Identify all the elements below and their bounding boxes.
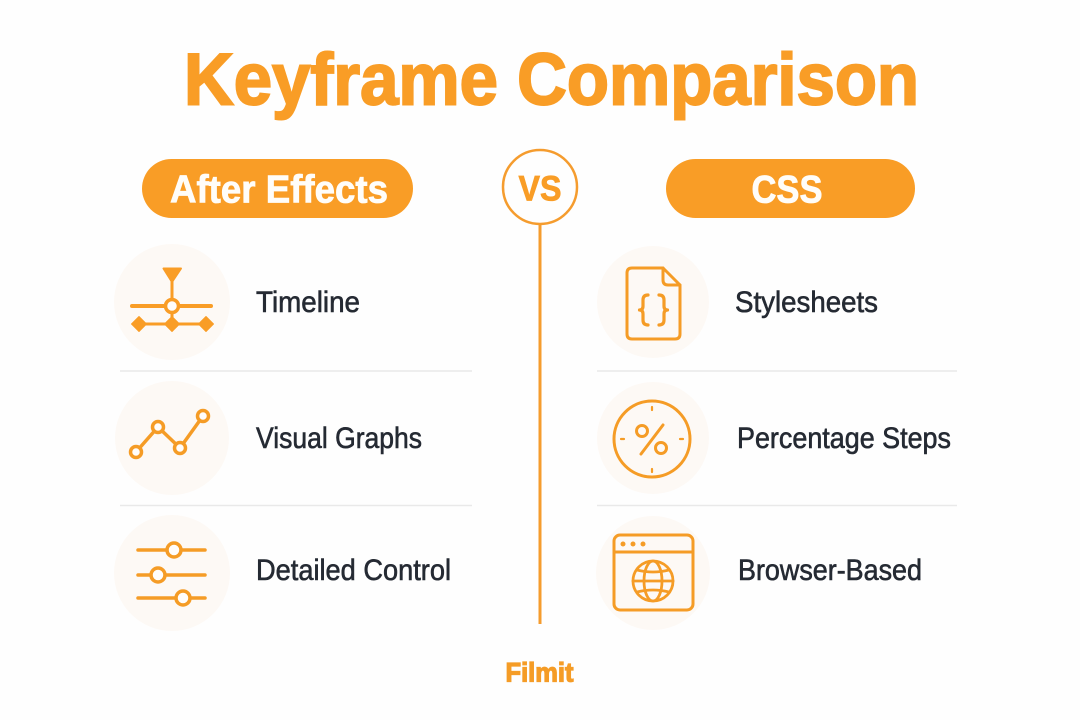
VS badge: VS bbox=[518, 170, 562, 208]
title: Keyframe Comparison bbox=[184, 40, 919, 120]
row: Stylesheets bbox=[597, 246, 878, 358]
heading: CSS: CSS bbox=[752, 168, 822, 212]
row: Percentage Steps bbox=[597, 382, 951, 494]
label: Stylesheets: Stylesheets bbox=[735, 286, 878, 319]
row: Browser-Based bbox=[596, 516, 922, 630]
label: Browser-Based: Browser-Based bbox=[738, 554, 922, 587]
heading: After Effects bbox=[142, 159, 413, 218]
footer brand: Filmit: Filmit bbox=[506, 658, 574, 688]
icon: sliders bbox=[138, 543, 205, 605]
icon: timeline bbox=[132, 268, 214, 332]
label: Percentage Steps: Percentage Steps bbox=[737, 422, 951, 455]
icon: percent dial bbox=[614, 401, 690, 477]
label: Timeline: Timeline bbox=[256, 286, 360, 319]
row: Visual Graphs bbox=[115, 381, 422, 495]
heading: CSS bbox=[666, 159, 915, 218]
VS badge bbox=[503, 150, 577, 224]
label: Detailed Control: Detailed Control bbox=[256, 554, 451, 587]
icon: line graph bbox=[130, 410, 208, 458]
row: Detailed Control bbox=[114, 515, 451, 631]
heading: After Effects: After Effects bbox=[170, 168, 388, 212]
label: Visual Graphs: Visual Graphs bbox=[256, 422, 422, 455]
row: Timeline bbox=[114, 244, 360, 360]
center divider line bbox=[538, 225, 542, 624]
icon: stylesheet file bbox=[627, 268, 680, 339]
icon: browser window with globe bbox=[614, 535, 693, 610]
